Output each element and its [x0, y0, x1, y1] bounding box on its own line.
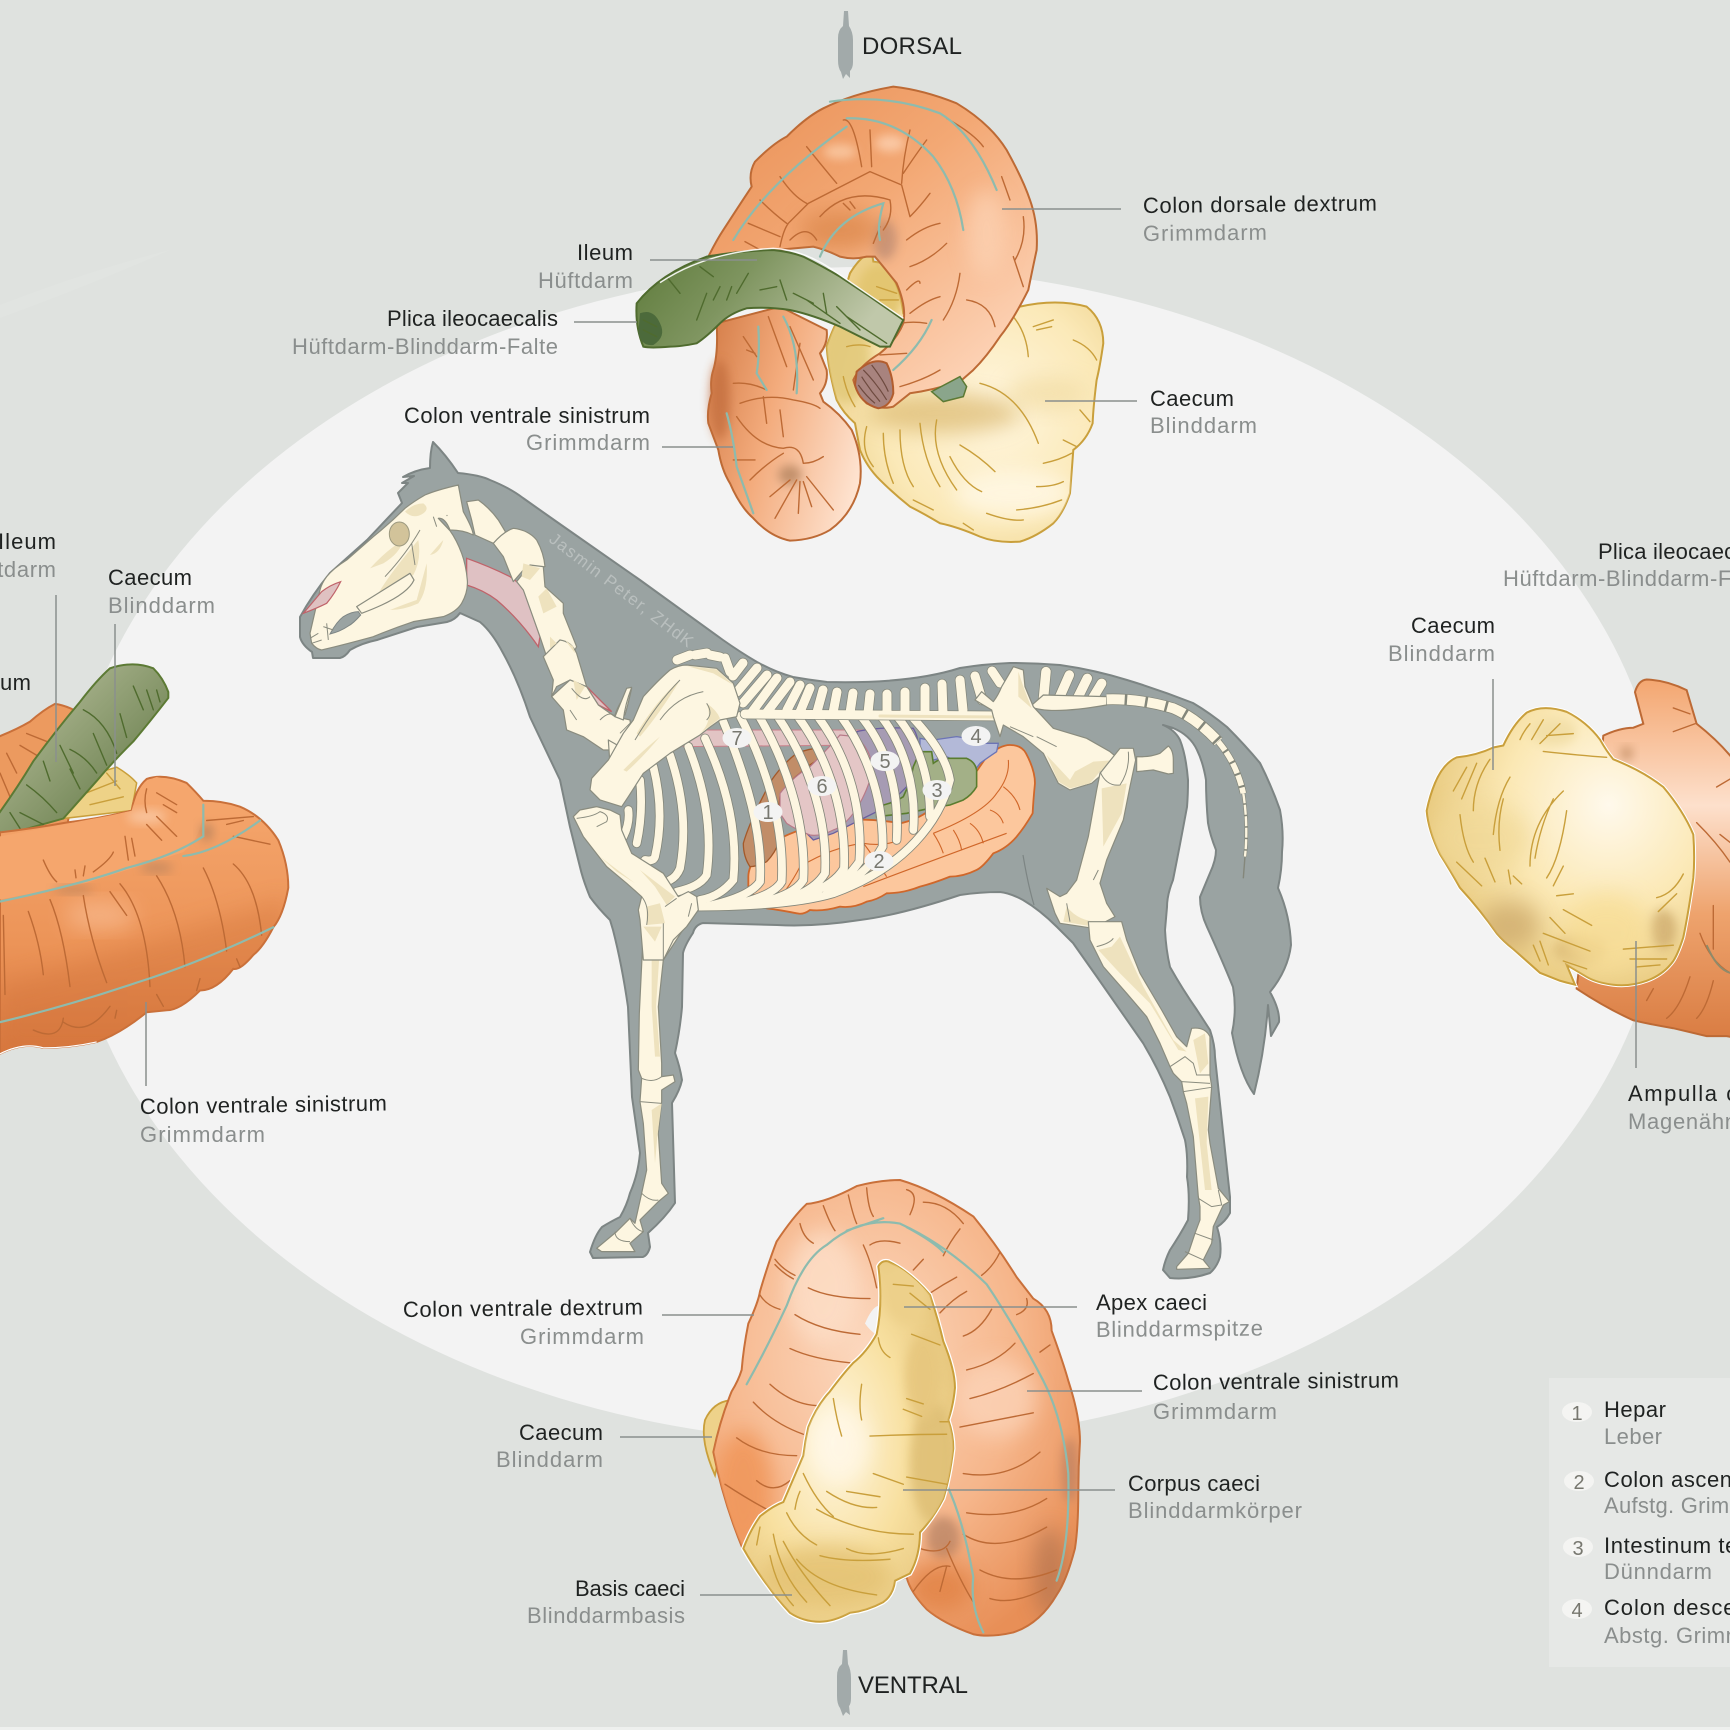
label: Ileum: Hüftdarm: [538, 268, 633, 293]
label: Ileum: [538, 240, 757, 293]
organ number bubbles: 3: [931, 780, 943, 802]
label: Plica ileocaecalis: Plica ileocaecalis: [387, 306, 558, 331]
label: Corpus caeci: Corpus caeci: [1128, 1471, 1260, 1496]
skull: [303, 485, 473, 650]
label: Caecum top: Blinddarm: [1150, 413, 1257, 438]
panel: dorsal view intestines: [636, 87, 1103, 542]
label: Basis caeci: Basis caeci: [575, 1576, 685, 1601]
organ number bubbles: 5: [879, 751, 891, 773]
label: Colon dorsale dextrum: [1002, 191, 1377, 246]
label: Caecum bottom: Caecum: [519, 1420, 603, 1445]
label: Apex caeci: [904, 1290, 1263, 1342]
label: Corpus caeci: Blinddarmkörper: [1128, 1498, 1302, 1523]
label: Colon ventrale sinistrum top: Grimmdarm: [526, 430, 650, 455]
panel: right lateral view intestines: [1427, 679, 1730, 1040]
label: Basis caeci: Blinddarmbasis: [527, 1603, 685, 1628]
label: Plica ileocaecalis: Hüftdarm-Blinddarm-Falte: [292, 334, 558, 359]
label: Colon ventrale sinistrum bottom: [1027, 1367, 1399, 1424]
label: Ileum left: [0, 529, 56, 762]
legend panel: Leber: [1604, 1424, 1662, 1449]
label: Colon ventrale dextrum: Grimmdarm: [520, 1324, 644, 1349]
label: Plica ileocaecalis: [292, 306, 637, 359]
label: Caecum right: [1388, 613, 1495, 770]
foreleg lower: [597, 903, 690, 1252]
label: Caecum left: [108, 565, 215, 786]
colon behind caecum: [1577, 679, 1730, 1040]
caecum large: [1427, 708, 1694, 985]
upper colon lobe: [0, 704, 87, 836]
label: Caecum left: Blinddarm: [108, 593, 215, 618]
caecum dorsal: [823, 252, 1103, 542]
legend panel: 2: [1573, 1472, 1585, 1494]
internal organs: [683, 728, 1035, 914]
trachea: [467, 558, 612, 712]
watermark credit: Jasmin Peter, ZHdK: [546, 529, 697, 651]
central light ellipse: [66, 267, 1666, 1443]
label: Apex caeci: Blinddarmspitze: [1096, 1316, 1263, 1342]
organ number bubbles: 2: [873, 851, 885, 873]
organ number bubbles: 4: [970, 726, 982, 748]
label: Colon ventrale dextrum: Colon ventrale dextrum: [403, 1294, 643, 1322]
label: Caecum right: Caecum: [1411, 613, 1495, 638]
label: Ileum: Ileum: [577, 240, 633, 265]
organ number bubbles: 7: [731, 728, 743, 750]
colon main: [0, 777, 288, 1054]
label: Colon ventrale sinistrum top: Colon ventrale sinistrum: [404, 403, 650, 428]
label: Caecum top: Caecum: [1150, 386, 1234, 411]
label: Caecum bottom: Blinddarm: [496, 1447, 603, 1472]
label: Colon ventrale sinistrum left: Grimmdarm: [140, 1122, 265, 1147]
label: Caecum left: Caecum: [108, 565, 192, 590]
cervical vertebrae: [467, 500, 632, 750]
colon dorsale dextrum arch: [708, 87, 1037, 408]
ileum with plica: [636, 248, 903, 347]
colon mouth: [855, 361, 893, 408]
colon ventrale: [713, 1180, 1080, 1636]
label: Colon ventrale sinistrum left: Colon ventrale sinistrum: [140, 1091, 387, 1119]
label: Plica ileocaecalis right: [1503, 539, 1730, 591]
label: Caecum right: Blinddarm: [1388, 641, 1495, 666]
label: Colon ventrale dextrum: [403, 1294, 754, 1349]
horse silhouette with skeleton: [300, 442, 1291, 1278]
sacrum, tail vertebrae, pelvis, femur: [975, 667, 1246, 928]
icon: ventral horse silhouette: [837, 1650, 851, 1716]
organ number bubbles: 1: [762, 802, 774, 824]
label: Colon ventrale sinistrum top: [404, 403, 733, 455]
legend panel: 4: [1571, 1600, 1583, 1622]
label: Caecum bottom: [496, 1420, 712, 1472]
heading: dorsal: DORSAL: [862, 33, 962, 60]
label: Colon ventrale sinistrum left: [140, 1002, 387, 1147]
label: Corpus caeci: [903, 1471, 1302, 1523]
ileum connection: [932, 377, 967, 402]
label: Apex caeci: Apex caeci: [1096, 1290, 1207, 1315]
panel: left lateral view intestines: [0, 664, 288, 1054]
organ number bubbles: 6: [816, 776, 828, 798]
thoracic and lumbar spine: [677, 653, 1000, 717]
rib cage: [623, 715, 950, 907]
scapula and humerus: [573, 665, 740, 960]
icon: dorsal horse silhouette: [838, 11, 853, 79]
label: Colon ventrale sinistrum bottom: Grimmdarm: [1153, 1399, 1277, 1424]
ileum tube: [0, 664, 168, 836]
label: Colon dorsale dextrum: Colon dorsale dextrum: [1143, 191, 1377, 218]
legend panel: Hepar: [1604, 1397, 1666, 1422]
colon ventrale sinistrum loop: [708, 307, 861, 541]
organ number bubbles: [722, 726, 990, 873]
legend panel: Dünndarm: [1604, 1559, 1712, 1584]
heading: ventral: VENTRAL: [858, 1672, 968, 1699]
label: Basis caeci: [527, 1576, 792, 1628]
legend panel: 3: [1572, 1538, 1584, 1560]
caecum fragment: [63, 767, 137, 819]
panel: ventral view intestines: [704, 1180, 1080, 1636]
hind lower leg: [1088, 922, 1229, 1269]
label: Colon dorsale dextrum: Grimmdarm: [1143, 220, 1267, 246]
label: Caecum top: [1045, 386, 1257, 438]
caecum ventral: [743, 1259, 957, 1622]
label: Ampulla coli right: [1628, 941, 1730, 1134]
legend panel: [1549, 1378, 1730, 1667]
small caecum lobe: [704, 1400, 730, 1475]
label: Colon ventrale sinistrum bottom: Colon ventrale sinistrum: [1153, 1367, 1399, 1395]
legend panel: 1: [1571, 1403, 1583, 1425]
